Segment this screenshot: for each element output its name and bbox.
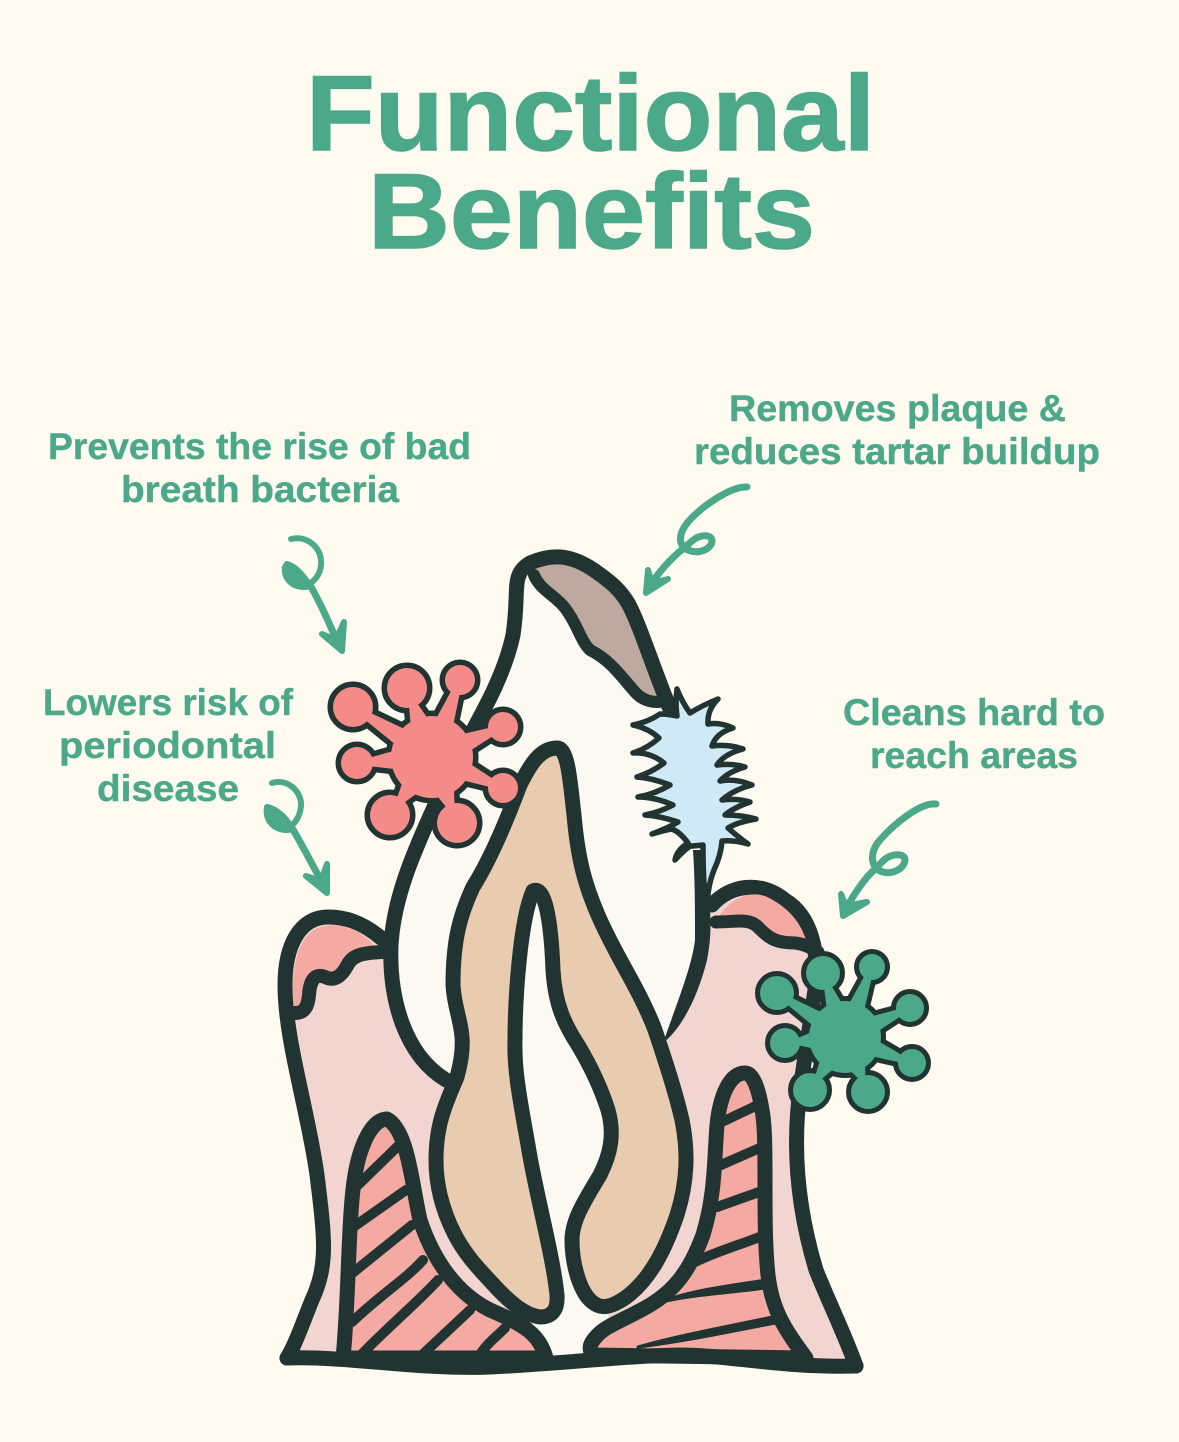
- green bacteria: [760, 954, 926, 1109]
- arrow: to red bacteria: [285, 538, 344, 651]
- title: Benefits: [368, 151, 815, 271]
- gum tissue: [283, 885, 857, 1367]
- label: bad breath bacteria: [48, 426, 471, 510]
- label: periodontal disease: periodontal: [59, 725, 276, 766]
- gum crest right: [716, 894, 818, 952]
- label: periodontal disease: disease: [97, 768, 239, 809]
- label: plaque and tartar: reduces tartar buildup: [694, 431, 1100, 472]
- red bacteria: [333, 665, 518, 843]
- bone left with stripes: [343, 1119, 546, 1358]
- label: periodontal disease: [43, 682, 294, 809]
- toothbrush head: [633, 689, 756, 905]
- label: hard to reach areas: Cleans hard to: [843, 692, 1105, 733]
- label: plaque and tartar: Removes plaque &: [729, 388, 1066, 429]
- gum outer outline and base: [285, 887, 856, 1367]
- tooth enamel fill: [391, 557, 702, 1362]
- right tooth wall: [663, 850, 710, 1043]
- arrow: to plaque: [646, 487, 747, 593]
- arrow: to hard to reach areas: [841, 804, 936, 916]
- label: hard to reach areas: [843, 692, 1105, 776]
- plaque outline: [534, 575, 658, 702]
- enamel outline: [391, 557, 672, 1080]
- label: bad breath bacteria: breath bacteria: [121, 469, 399, 510]
- gum crest left: [293, 925, 382, 1013]
- label: plaque and tartar: [694, 388, 1100, 472]
- arrow: to periodontal disease: [267, 782, 327, 893]
- title: Functional: [306, 53, 875, 173]
- label: periodontal disease: Lowers risk of: [43, 682, 294, 723]
- tooth root dentine: [436, 748, 686, 1317]
- label: hard to reach areas: reach areas: [870, 735, 1078, 776]
- plaque on tooth: [536, 558, 668, 710]
- label: bad breath bacteria: Prevents the rise of bad: [48, 426, 471, 467]
- title: [306, 53, 875, 271]
- bone right with stripes: [590, 1073, 806, 1358]
